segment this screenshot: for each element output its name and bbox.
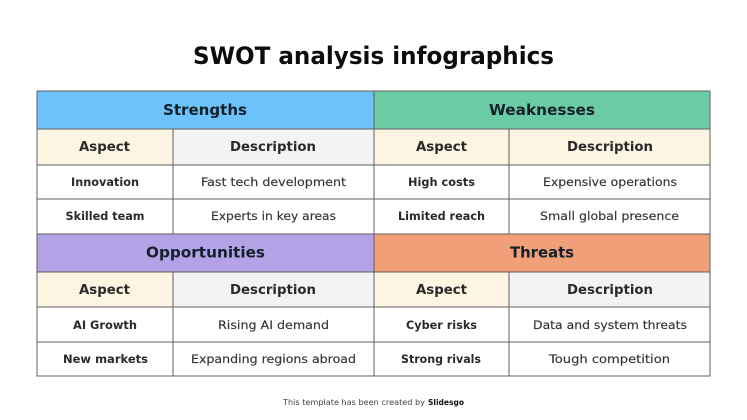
strengths row 2: Skilled team (66, 209, 145, 223)
strengths header (37, 91, 374, 129)
threats header (374, 234, 710, 272)
threats description column heading: Description (567, 283, 653, 298)
weaknesses description column heading (509, 129, 710, 165)
weaknesses aspect column heading: Aspect (416, 140, 467, 155)
opportunities row 2: Expanding regions abroad (191, 352, 356, 366)
opportunities description column heading (173, 272, 374, 307)
weaknesses row 2 (398, 209, 679, 223)
threats row 1 (406, 318, 687, 332)
threats row 1: Cyber risks (406, 318, 477, 332)
weaknesses row 2: Small global presence (540, 209, 679, 223)
strengths row 2: Experts in key areas (211, 209, 336, 223)
opportunities row 2 (63, 352, 356, 366)
weaknesses header: Weaknesses (489, 101, 595, 119)
threats row 2 (401, 352, 670, 366)
threats aspect column heading: Aspect (416, 283, 467, 298)
panel: weaknesses (374, 91, 710, 223)
opportunities row 1 (73, 318, 329, 332)
weaknesses description column heading: Description (567, 140, 653, 155)
weaknesses row 2: Limited reach (398, 209, 485, 223)
strengths row 1 (71, 175, 347, 189)
strengths header: Strengths (163, 101, 247, 119)
strengths row 1: Innovation (71, 175, 139, 189)
footer credit: This template has been created by (282, 398, 426, 407)
opportunities header (37, 234, 374, 272)
opportunities header: Opportunities (146, 244, 265, 262)
opportunities row 1: Rising AI demand (218, 318, 329, 332)
threats aspect column heading (374, 272, 509, 307)
weaknesses row 1: High costs (408, 175, 475, 189)
weaknesses row 1 (408, 175, 677, 189)
opportunities row 1: AI Growth (73, 318, 137, 332)
threats description column heading (509, 272, 710, 307)
threats row 1: Data and system threats (533, 318, 687, 332)
strengths row 2 (66, 209, 336, 223)
strengths row 1: Fast tech development (201, 175, 347, 189)
opportunities row 2: New markets (63, 352, 148, 366)
panel: strengths (37, 91, 374, 223)
strengths aspect column heading: Aspect (79, 140, 130, 155)
weaknesses row 1: Expensive operations (543, 175, 677, 189)
weaknesses header (374, 91, 710, 129)
opportunities aspect column heading (37, 272, 173, 307)
title: SWOT analysis infographics (193, 42, 554, 70)
weaknesses aspect column heading (374, 129, 509, 165)
threats header: Threats (510, 244, 574, 262)
strengths description column heading: Description (230, 140, 316, 155)
opportunities description column heading: Description (230, 283, 316, 298)
strengths aspect column heading (37, 129, 173, 165)
threats row 2: Tough competition (548, 352, 670, 366)
strengths description column heading (173, 129, 374, 165)
SWOT table (37, 91, 710, 376)
panel: opportunities (37, 234, 374, 366)
panel: threats (374, 234, 710, 366)
opportunities aspect column heading: Aspect (79, 283, 130, 298)
footer credit: Slidesgo (428, 398, 464, 407)
threats row 2: Strong rivals (401, 352, 481, 366)
